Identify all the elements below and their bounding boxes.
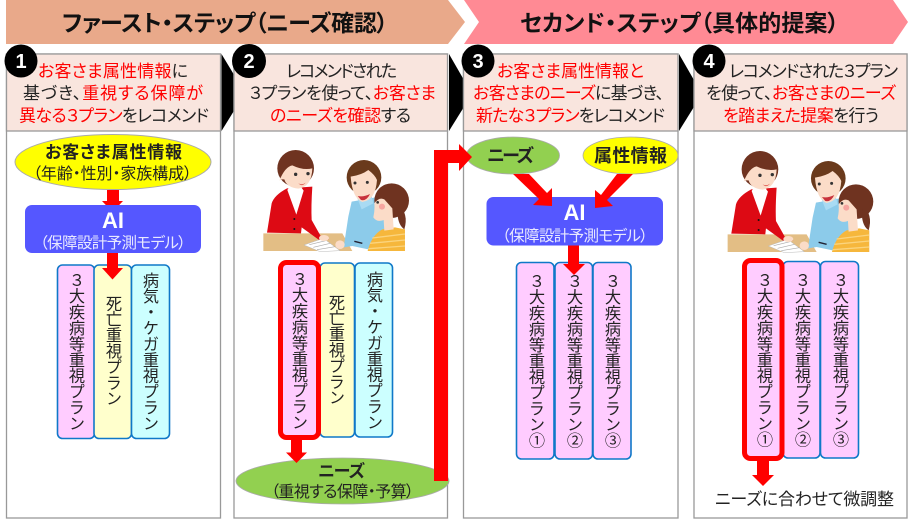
step 4 description: を使って、お客さまのニーズ xyxy=(706,83,897,103)
plan 3-3 xyxy=(593,262,631,459)
plan: death coverage: 死亡重視プラン xyxy=(326,294,345,405)
step 2 description xyxy=(234,54,448,131)
chevron: step 2 to 3 xyxy=(449,54,472,131)
banner: second step xyxy=(464,0,908,44)
step 2 description: レコメンドされた xyxy=(286,62,397,81)
banner: first step xyxy=(6,0,465,44)
ellipse: needs: ニーズ xyxy=(318,461,365,481)
plan 4-2: ３大疾病等重視プラン② xyxy=(792,272,811,447)
chevron: step 1 to 2 xyxy=(222,54,245,131)
badge 3: 3 xyxy=(472,51,484,73)
step 1 description: 異なる３プランをレコメンド xyxy=(19,106,209,126)
plan 3-1: ３大疾病等重視プラン① xyxy=(526,273,545,448)
arrow: AI to plans xyxy=(102,253,123,280)
panel: step 1 xyxy=(4,44,220,518)
arrow: plan to adjustment xyxy=(752,461,774,486)
panel: step 2 xyxy=(232,44,449,518)
banner: second step: セカンド・ステップ（具体的提案） xyxy=(520,10,839,36)
ellipse: needs: ニーズ xyxy=(487,145,534,166)
arrow: plan to needs xyxy=(286,440,307,463)
chevron: step 3 to 4 xyxy=(679,54,702,131)
step 3 description: お客さまのニーズに基づき、 xyxy=(473,84,664,103)
plan: death coverage xyxy=(320,263,354,437)
badge 4: 4 xyxy=(703,51,715,73)
step 1 description: 基づき、重視する保障が xyxy=(23,84,203,103)
step 3 description: お客さま属性情報と xyxy=(497,62,644,81)
plan: death coverage xyxy=(94,265,132,438)
ellipse: customer attributes: （年齢・性別・家族構成） xyxy=(33,165,192,183)
box: AI model: （保障設計予測モデル） xyxy=(40,233,186,252)
step 4 description: レコメンドされた３プラン xyxy=(729,62,898,81)
badge 2 xyxy=(232,44,266,78)
plan: illness and injury xyxy=(132,265,170,438)
badge 4 xyxy=(692,44,726,78)
plan: illness and injury: 病気・ケガ重視プラン xyxy=(364,271,383,430)
box: AI model: （保障設計予測モデル） xyxy=(502,226,648,245)
badge 2: 2 xyxy=(243,51,255,73)
box: AI model xyxy=(486,197,663,246)
badge 3 xyxy=(462,44,494,78)
arrow: attributes to AI xyxy=(102,190,123,212)
step 2 description: のニーズを確認する xyxy=(270,106,411,126)
step 1 description: お客さま属性情報に xyxy=(38,62,188,81)
ellipse: needs: （重視する保障・予算） xyxy=(271,482,414,501)
plan: illness and injury: 病気・ケガ重視プラン xyxy=(140,272,159,431)
caption: adjust to needs: ニーズに合わせて微調整 xyxy=(715,490,894,509)
ellipse: customer attributes: お客さま属性情報 xyxy=(45,142,182,162)
step 4 description xyxy=(694,54,907,131)
plan 3-3: ３大疾病等重視プラン③ xyxy=(602,273,621,448)
connector arrow: needs to step 3 xyxy=(434,144,472,481)
plan 3-1 xyxy=(516,262,554,459)
plan 3-2: ３大疾病等重視プラン② xyxy=(564,273,583,448)
plan: illness and injury xyxy=(355,263,392,437)
step 2 description: ３プランを使って、お客さま xyxy=(249,83,436,103)
ellipse: needs xyxy=(236,458,449,504)
arrow: needs to AI xyxy=(513,174,552,206)
badge 1: 1 xyxy=(15,51,27,73)
banner: first step: ファースト・ステップ（ニーズ確認） xyxy=(62,10,388,36)
plan: three major diseases (selected) xyxy=(280,262,318,438)
ellipse: attributes xyxy=(583,137,678,174)
ellipse: attributes: 属性情報 xyxy=(594,146,667,166)
plan 4-3: ３大疾病等重視プラン③ xyxy=(830,272,849,447)
arrow: AI to plans xyxy=(563,246,585,275)
plan: three major diseases xyxy=(58,265,94,438)
plan 4-3 xyxy=(820,262,858,458)
step 3 description xyxy=(464,54,678,131)
plan 4-2 xyxy=(783,262,820,458)
arrow: attributes to AI xyxy=(595,174,633,208)
step 1 description xyxy=(6,54,220,131)
panel: step 3 xyxy=(462,44,678,518)
plan 4-1 (selected) xyxy=(744,260,782,458)
illustration: consultation xyxy=(728,151,873,253)
panel: step 4 xyxy=(692,44,907,518)
plan: three major diseases (selected): ３大疾病等重視プラン xyxy=(289,271,308,430)
ellipse: needs xyxy=(466,137,560,174)
illustration: consultation xyxy=(263,150,409,252)
plan 3-2 xyxy=(555,262,592,459)
step 3 description: 新たな３プランをレコメンド xyxy=(476,106,665,126)
plan: three major diseases: ３大疾病等重視プラン xyxy=(66,272,85,431)
plan 4-1 (selected): ３大疾病等重視プラン① xyxy=(754,272,773,447)
box: AI model: AI xyxy=(102,208,124,233)
box: AI model: AI xyxy=(564,200,586,225)
box: AI model xyxy=(25,205,201,253)
plan: death coverage: 死亡重視プラン xyxy=(103,295,122,406)
ellipse: customer attributes xyxy=(15,134,211,190)
badge 1 xyxy=(4,44,38,78)
step 4 description: を踏まえた提案を行う xyxy=(723,106,879,126)
